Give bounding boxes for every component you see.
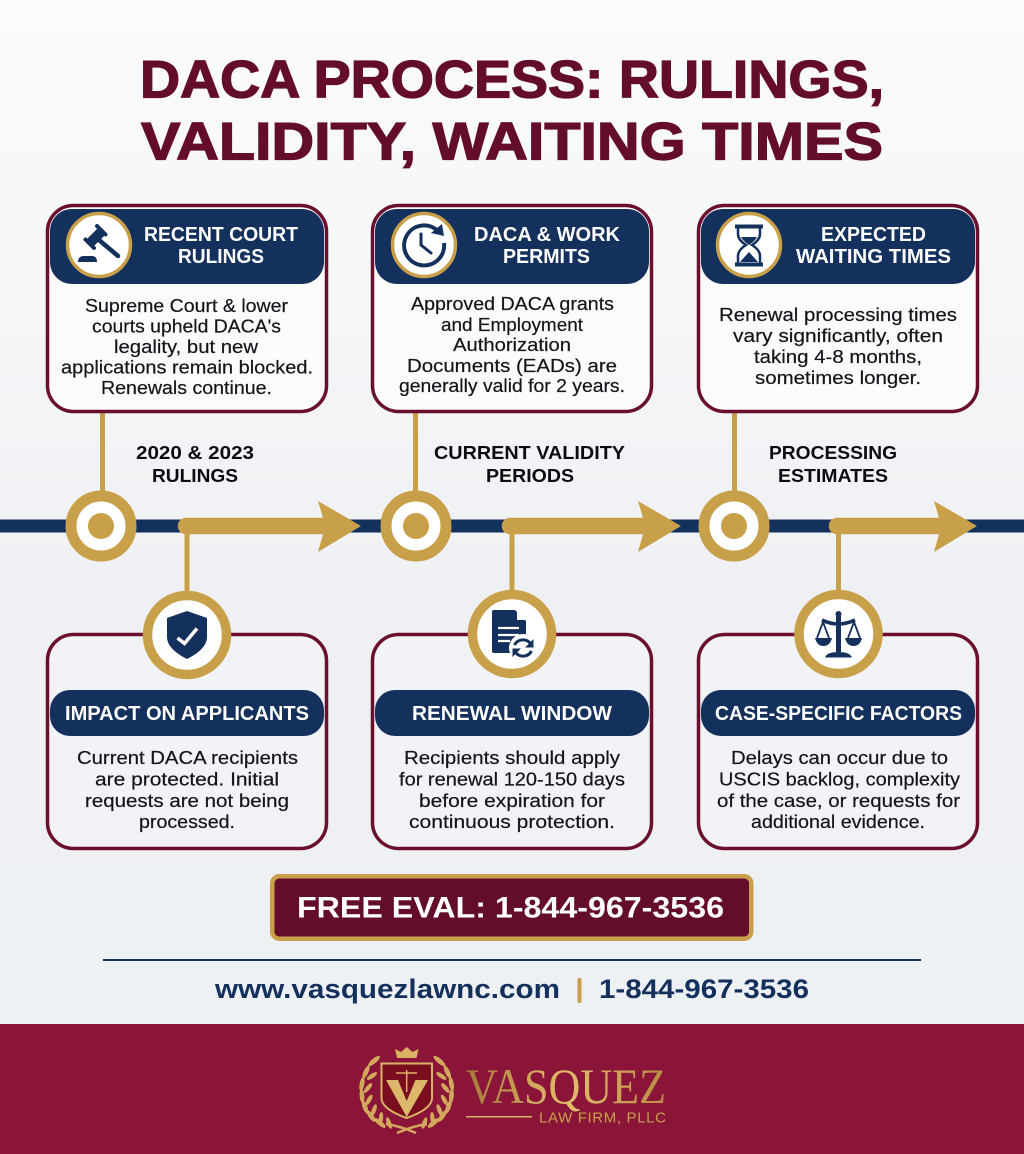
body text: generally valid for 2 years.	[399, 375, 625, 396]
body text: Current DACA recipients	[77, 747, 298, 768]
body text: Approved DACA grants	[411, 293, 614, 314]
icon: gavel	[68, 214, 130, 276]
header pill	[50, 690, 324, 736]
body text: continuous protection.	[409, 811, 615, 832]
logo subtitle: LAW FIRM, PLLC	[539, 1110, 666, 1126]
heading	[474, 224, 621, 268]
call to action button: FREE EVAL: 1-844-967-3536	[297, 892, 724, 925]
body text	[399, 293, 625, 396]
body text	[77, 747, 298, 832]
header bar	[701, 209, 975, 284]
heading: RULINGS	[178, 246, 264, 268]
timeline node 3	[704, 496, 764, 556]
connector: arrow 2 to bottom card	[510, 530, 514, 594]
header pill	[701, 690, 975, 736]
heading: DACA & WORK	[474, 224, 621, 246]
panel: renewal window	[372, 594, 652, 848]
icon: document with renewal arrows	[472, 594, 552, 674]
body text: courts upheld DACA's	[92, 316, 281, 336]
timeline label: 2020 & 2023 rulings	[136, 442, 254, 486]
body text: additional evidence.	[751, 811, 925, 832]
heading: RENEWAL WINDOW	[412, 703, 612, 725]
panel: expected waiting times	[698, 206, 978, 412]
heading: PERMITS	[503, 246, 590, 268]
timeline label: current validity periods	[434, 442, 626, 486]
body text: before expiration for	[419, 790, 605, 811]
icon: scales of justice	[799, 594, 878, 674]
contact line: 1-844-967-3536	[599, 974, 809, 1004]
body text: vary significantly, often	[733, 325, 943, 346]
footer band	[0, 1024, 1024, 1154]
body text: Delays can occur due to	[731, 747, 948, 768]
contact line: www.vasquezlawnc.com	[214, 974, 560, 1004]
connector: top card 2 to node	[413, 410, 418, 494]
icon: clock	[392, 214, 456, 276]
heading	[796, 224, 951, 268]
timeline node 1	[71, 496, 131, 556]
arrow 2	[502, 501, 681, 552]
icon: hourglass	[718, 214, 780, 276]
header bar	[50, 209, 324, 284]
body text: Supreme Court & lower	[85, 295, 288, 316]
divider	[103, 959, 921, 961]
timeline label: processing estimates	[769, 442, 897, 486]
body text: are protected. Initial	[95, 768, 279, 790]
body text: applications remain blocked.	[61, 356, 313, 378]
panel: impact on applicants	[48, 596, 326, 848]
panel: recent court rulings	[48, 206, 326, 412]
header bar	[375, 209, 649, 284]
body text: for renewal 120-150 days	[399, 768, 625, 790]
contact line	[214, 974, 809, 1004]
timeline label: current validity periods: PERIODS	[486, 465, 574, 486]
heading: WAITING TIMES	[796, 246, 951, 268]
timeline bar	[0, 520, 1024, 532]
logo crest	[358, 1047, 455, 1133]
header pill	[375, 690, 649, 736]
panel: case-specific factors	[698, 594, 978, 848]
timeline node 2	[386, 496, 446, 556]
body text: sometimes longer.	[755, 367, 921, 388]
timeline label: processing estimates: PROCESSING	[769, 442, 897, 463]
logo: Vasquez Law Firm	[358, 1047, 666, 1133]
timeline label: 2020 & 2023 rulings: RULINGS	[152, 465, 238, 486]
body text: Documents (EADs) are	[407, 355, 617, 376]
body text	[717, 747, 961, 832]
logo wordmark: VASQUEZ	[466, 1059, 666, 1114]
heading: RECENT COURT	[144, 224, 298, 246]
timeline label: 2020 & 2023 rulings: 2020 & 2023	[136, 442, 254, 463]
body text	[399, 747, 625, 832]
title	[140, 50, 884, 172]
body text: Renewal processing times	[719, 304, 957, 325]
heading: IMPACT ON APPLICANTS	[65, 703, 309, 725]
arrow 1	[178, 501, 361, 552]
body text: legality, but new	[114, 336, 259, 357]
connector: top card 3 to node	[732, 410, 737, 494]
body text: processed.	[139, 811, 235, 832]
title: VALIDITY, WAITING TIMES	[141, 112, 883, 172]
body text: requests are not being	[85, 790, 289, 811]
body text: USCIS backlog, complexity	[719, 768, 961, 790]
heading: CASE-SPECIFIC FACTORS	[715, 703, 962, 725]
body text: of the case, or requests for	[717, 790, 960, 811]
connector: arrow 1 to bottom card	[184, 530, 190, 594]
body text	[719, 304, 957, 388]
connector: arrow 3 to bottom card	[836, 530, 841, 594]
panel: DACA and work permits	[372, 206, 652, 412]
arrow 3	[829, 501, 977, 552]
heading	[144, 224, 298, 268]
heading: EXPECTED	[821, 224, 926, 246]
body text: Authorization	[453, 334, 571, 355]
call to action button	[272, 876, 751, 939]
body text: Renewals continue.	[101, 377, 272, 398]
connector: top card 1 to node	[100, 410, 105, 494]
body text: Recipients should apply	[404, 747, 621, 768]
title: DACA PROCESS: RULINGS,	[140, 50, 884, 110]
timeline label: current validity periods: CURRENT VALIDITY	[434, 442, 626, 463]
timeline label: processing estimates: ESTIMATES	[778, 465, 888, 486]
icon: shield	[148, 596, 226, 674]
body text: and Employment	[441, 314, 583, 335]
body text: taking 4-8 months,	[754, 346, 922, 367]
body text	[61, 295, 313, 398]
